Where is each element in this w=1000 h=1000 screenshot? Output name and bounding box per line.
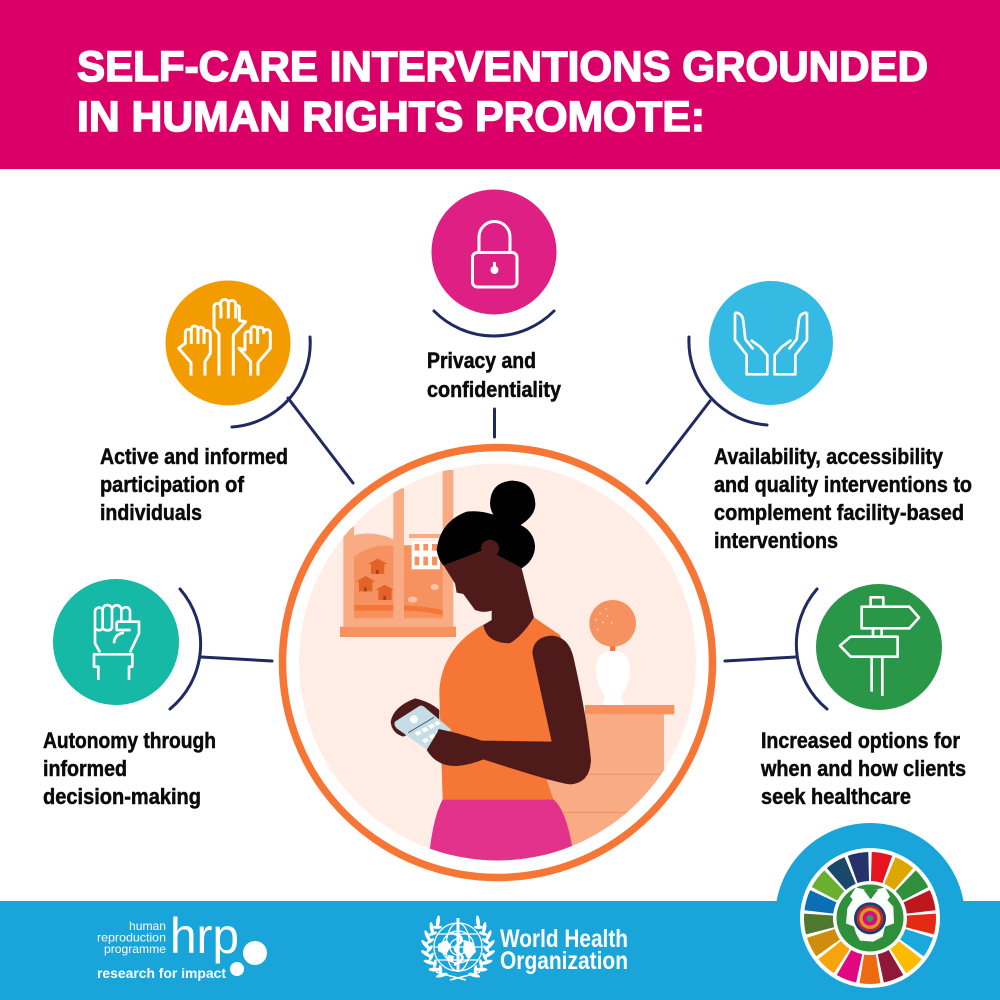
window with village view bbox=[340, 470, 456, 637]
WHO emblem bbox=[420, 915, 496, 980]
footer band bbox=[0, 901, 1000, 1000]
label: autonomy bbox=[43, 728, 216, 809]
label: privacy: Privacy and bbox=[427, 348, 536, 373]
label: autonomy: Autonomy through bbox=[43, 728, 216, 753]
label: options: when and how clients bbox=[760, 756, 966, 781]
label: participation: Active and informed bbox=[100, 444, 288, 469]
hrp logo bbox=[97, 908, 267, 981]
hrp logo: reproduction bbox=[97, 930, 166, 944]
title: SELF-CARE INTERVENTIONS GROUNDED bbox=[77, 44, 928, 91]
label: participation: participation of bbox=[100, 472, 245, 497]
header banner bbox=[0, 0, 1000, 169]
label: participation bbox=[100, 444, 288, 525]
label: autonomy: informed bbox=[43, 756, 127, 781]
label: options: Increased options for bbox=[761, 728, 960, 753]
panel: privacy and confidentiality bbox=[427, 190, 562, 437]
label: options bbox=[760, 728, 966, 809]
label: options: seek healthcare bbox=[761, 784, 911, 809]
label: privacy: confidentiality bbox=[427, 377, 562, 402]
title: IN HUMAN RIGHTS PROMOTE: bbox=[77, 94, 705, 141]
panel: autonomy bbox=[43, 579, 272, 809]
WHO wordmark bbox=[500, 925, 628, 975]
panel: active participation bbox=[100, 280, 353, 525]
label: privacy bbox=[427, 348, 562, 402]
panel: increased options bbox=[725, 584, 966, 809]
label: availability: and quality interventions to bbox=[714, 472, 972, 497]
icon: raised fist bbox=[53, 579, 179, 705]
SDG wheel badge bbox=[775, 823, 965, 1000]
label: availability: complement facility-based bbox=[714, 500, 964, 525]
icon: signpost bbox=[816, 584, 942, 710]
label: autonomy: decision-making bbox=[43, 784, 201, 809]
label: availability: Availability, accessibility bbox=[714, 444, 944, 469]
icon: raised hands bbox=[166, 280, 290, 406]
icon: open hands bbox=[709, 281, 833, 405]
WHO wordmark: Organization bbox=[500, 947, 628, 975]
hrp logo: research for impact bbox=[97, 965, 226, 981]
woman bbox=[391, 481, 591, 873]
label: availability: interventions bbox=[714, 528, 838, 553]
label: availability bbox=[714, 444, 972, 553]
WHO logo bbox=[420, 915, 628, 980]
dresser with plant bbox=[543, 600, 674, 873]
central illustration: woman reading a pill pack bbox=[282, 448, 712, 878]
hrp logo: programme bbox=[104, 942, 166, 956]
panel: availability, accessibility, quality bbox=[647, 281, 972, 553]
icon: padlock bbox=[432, 190, 556, 314]
hrp logo: human bbox=[129, 919, 166, 933]
hrp logo: hrp bbox=[170, 908, 239, 964]
label: participation: individuals bbox=[100, 500, 202, 525]
WHO wordmark: World Health bbox=[500, 925, 628, 953]
title bbox=[77, 44, 928, 141]
